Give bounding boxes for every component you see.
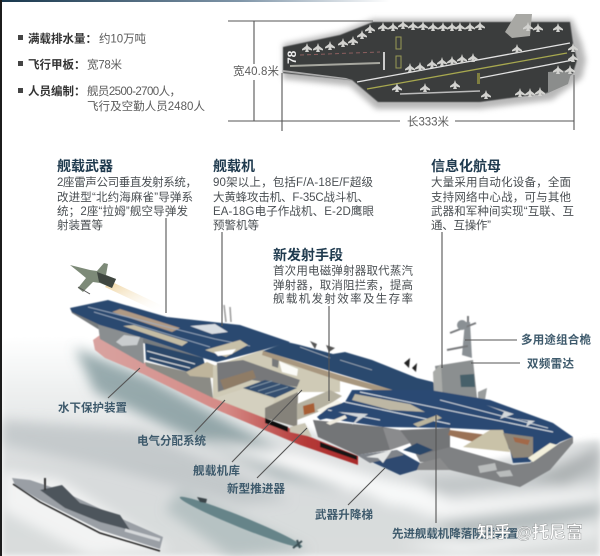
panel: shipboard weapons <box>57 158 197 232</box>
deck sub-pit <box>352 394 425 412</box>
specifications list: 舰员2500-2700人， <box>87 84 181 98</box>
label: landing arrest device: 先进舰载机降落阻拦装置 <box>392 526 518 540</box>
label: hangar: 舰载机库 <box>193 464 240 478</box>
forward hull side <box>98 325 144 364</box>
icon: fighter jet <box>70 263 165 312</box>
escort warship <box>12 478 163 551</box>
label: dual-band radar: 双频雷达 <box>527 356 574 370</box>
label: multi-purpose mast: 多用途组合桅 <box>521 332 592 346</box>
watermark: 知乎 @托尼富 <box>477 522 583 542</box>
sea with wake streaks <box>2 335 600 556</box>
panel: information carrier <box>431 158 574 232</box>
gray wall <box>217 360 300 392</box>
far flight deck <box>263 342 441 400</box>
leader lines <box>108 218 520 523</box>
panel: information carrier: 支持网络中心战，可与其他 <box>431 190 572 204</box>
cutaway interior base <box>213 350 340 427</box>
panel: shipboard weapons: 统；2座“拉姆”舰空导弹发 <box>57 204 188 218</box>
white bulge <box>279 361 298 376</box>
panel: carrier aircraft: 大黄蜂攻击机、F-35C战斗机、 <box>213 190 369 204</box>
label: new propulsion: 新型推进器 <box>227 482 286 496</box>
panel: information carrier: 武器和军种间实现“互联、互 <box>431 204 574 218</box>
lower compartments <box>215 389 275 418</box>
forward recessed deck <box>145 343 206 372</box>
submarine <box>178 492 304 552</box>
label: power distribution: 电气分配系统 <box>137 434 206 448</box>
main carrier cutaway <box>70 300 573 487</box>
red lower hull <box>93 335 358 465</box>
specifications list: 人员编制： <box>28 84 86 98</box>
width dimension label: 宽40.8米 <box>233 64 280 78</box>
panel: carrier aircraft <box>213 158 374 232</box>
hull number: 78 <box>285 50 299 64</box>
brown compartments and beige block <box>448 430 487 445</box>
panel: shipboard weapons: 舰载武器 <box>57 158 113 174</box>
length dimension label: 长333米 <box>407 116 450 128</box>
panel: new launch method <box>273 247 414 306</box>
panel: new launch method: 弹射器，取消阻拦索，提高 <box>273 278 413 292</box>
aft flight deck upper band <box>317 390 573 463</box>
forward deck rim <box>70 308 203 362</box>
panel: carrier aircraft: EA-18G电子作战机、E-2D鹰眼 <box>213 204 374 218</box>
aft hull <box>410 437 573 487</box>
panel: information carrier: 通、互操作” <box>431 218 491 232</box>
forward flight deck <box>70 300 290 362</box>
mid gray sponson <box>313 420 450 455</box>
specifications list: 满载排水量： <box>28 32 97 46</box>
panel: shipboard weapons: 射装置等 <box>57 218 103 232</box>
top view of carrier <box>283 14 586 109</box>
specifications list: 约10万吨 <box>99 32 146 46</box>
label: underwater protection: 水下保护装置 <box>58 400 127 414</box>
panel: information carrier: 大量采用自动化设备，全面 <box>431 175 571 189</box>
parked jets <box>338 405 535 427</box>
panel: shipboard weapons: 改进型“北约海麻雀”导弹系 <box>57 190 193 204</box>
panel: carrier aircraft: 90架以上，包括F/A-18E/F超级 <box>213 175 374 189</box>
specifications list: 飞行及空勤人员2480人 <box>87 99 206 113</box>
panel: new launch method: 首次用电磁弹射器取代蒸汽 <box>273 264 414 278</box>
panel: carrier aircraft: 舰载机 <box>213 158 255 174</box>
specifications list: 宽78米 <box>87 58 122 72</box>
panel: carrier aircraft: 预警机等 <box>213 218 259 232</box>
label: weapon elevator: 武器升降梯 <box>315 508 373 522</box>
weapon elevator platform <box>357 450 420 475</box>
panel: new launch method: 新发射手段 <box>273 247 343 263</box>
panel: new launch method: 舰载机发射效率及生存率 <box>273 292 413 306</box>
panel: shipboard weapons: 2座雷声公司垂直发射系统， <box>57 175 197 189</box>
top view dimension lines <box>228 21 574 131</box>
hangar deck <box>243 380 297 398</box>
island superstructure <box>433 316 487 407</box>
panel: information carrier: 信息化航母 <box>431 158 501 174</box>
specifications list: 飞行甲板： <box>28 58 86 72</box>
specifications list <box>18 32 206 113</box>
